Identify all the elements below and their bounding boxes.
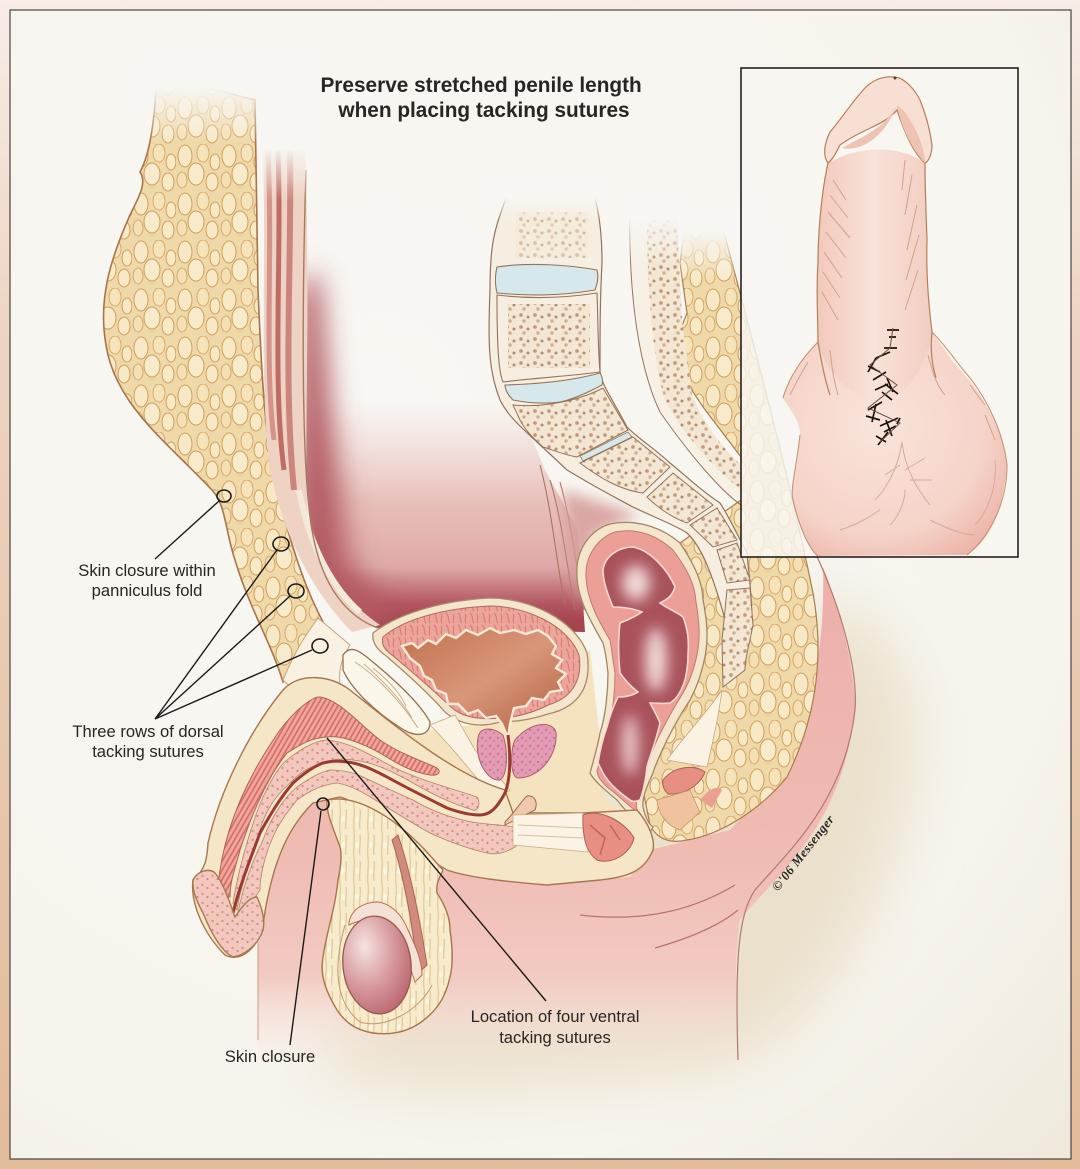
peritoneal shading right of mesentery <box>562 490 640 610</box>
suture marker: dorsal row three <box>312 639 328 653</box>
label: skin closure within panniculus fold: Skin closure within <box>78 561 216 580</box>
spine <box>485 185 753 687</box>
spermatic cord <box>392 835 427 973</box>
signature: ©'06 Messenger <box>769 811 838 894</box>
label: dorsal tacking sutures: Three rows of dorsal <box>72 722 224 741</box>
posterior spinal column <box>630 195 741 500</box>
levator fan and anal canal <box>657 690 722 830</box>
title: when placing tacking sutures <box>337 99 630 122</box>
perineal fibres <box>513 813 588 852</box>
top fade over wall and fat <box>136 58 314 143</box>
rectal muscular wall <box>586 531 699 812</box>
mesentery lines <box>540 465 584 610</box>
label: skin closure within panniculus fold: panniculus fold <box>92 581 202 600</box>
inset: scrotum outline <box>783 332 1007 556</box>
penis outer envelope <box>193 678 653 957</box>
label: dorsal tacking sutures: tacking sutures <box>92 742 204 761</box>
white fibres to prostate <box>430 715 510 800</box>
rectum <box>577 522 707 833</box>
spine column <box>489 195 752 627</box>
abdominal cavity shading <box>296 270 600 650</box>
inset: raphe and rugae <box>840 442 995 535</box>
muscle top fade <box>258 120 318 200</box>
suture marker: dorsal row two <box>288 584 304 598</box>
leader lines <box>155 501 546 1045</box>
suture marker: skin closure <box>317 798 329 810</box>
anatomical illustration: sagittal section <box>103 58 855 1060</box>
inset frame <box>741 68 1018 557</box>
epididymis <box>349 902 422 982</box>
title: Preserve stretched penile length <box>320 74 642 97</box>
corpus cavernosum <box>218 697 439 897</box>
label: ventral tacking sutures: Location of four ventral <box>471 1007 639 1026</box>
anal sphincter section <box>583 813 634 861</box>
rectal lumen highlights <box>622 565 667 775</box>
rectal lumen <box>598 547 688 802</box>
inset: shaft wrinkles <box>790 160 995 440</box>
bulbourethral gland <box>505 796 536 825</box>
inset: closed incision view <box>741 68 1018 557</box>
rectal outer coat <box>577 522 707 833</box>
prostate <box>477 724 556 780</box>
inset: scrotum <box>783 332 1007 556</box>
pubic bone <box>343 649 430 734</box>
abdominal wall muscle <box>262 130 380 632</box>
inset: glans <box>825 77 932 163</box>
penis section <box>193 678 653 957</box>
label: ventral tacking sutures: tacking sutures <box>499 1028 611 1047</box>
scrotal wall <box>322 799 452 1034</box>
inset: shaft outline <box>817 163 936 395</box>
glans <box>193 870 264 957</box>
inset: shaft <box>817 150 932 400</box>
urethra <box>232 735 510 950</box>
sac outline <box>338 925 432 1024</box>
fat behind bladder and perineal fill <box>350 650 653 885</box>
bladder <box>373 598 588 738</box>
soft background shading <box>300 600 914 1090</box>
suture marker: dorsal row one <box>273 537 289 551</box>
scrotum and testis <box>322 799 452 1034</box>
panniculus fat layer <box>103 75 340 682</box>
suspensory ligament <box>283 618 350 700</box>
body skin wash below pelvis <box>258 550 855 1060</box>
label: skin closure: Skin closure <box>225 1047 315 1066</box>
suture marker: panniculus <box>217 490 231 502</box>
testis <box>338 913 416 1017</box>
corpus spongiosum lower <box>237 770 517 917</box>
corpus spongiosum upper <box>233 740 479 910</box>
lower abdominal fat envelope <box>643 205 818 841</box>
inset: sutures <box>866 328 900 445</box>
inset frame tint <box>741 68 1018 557</box>
